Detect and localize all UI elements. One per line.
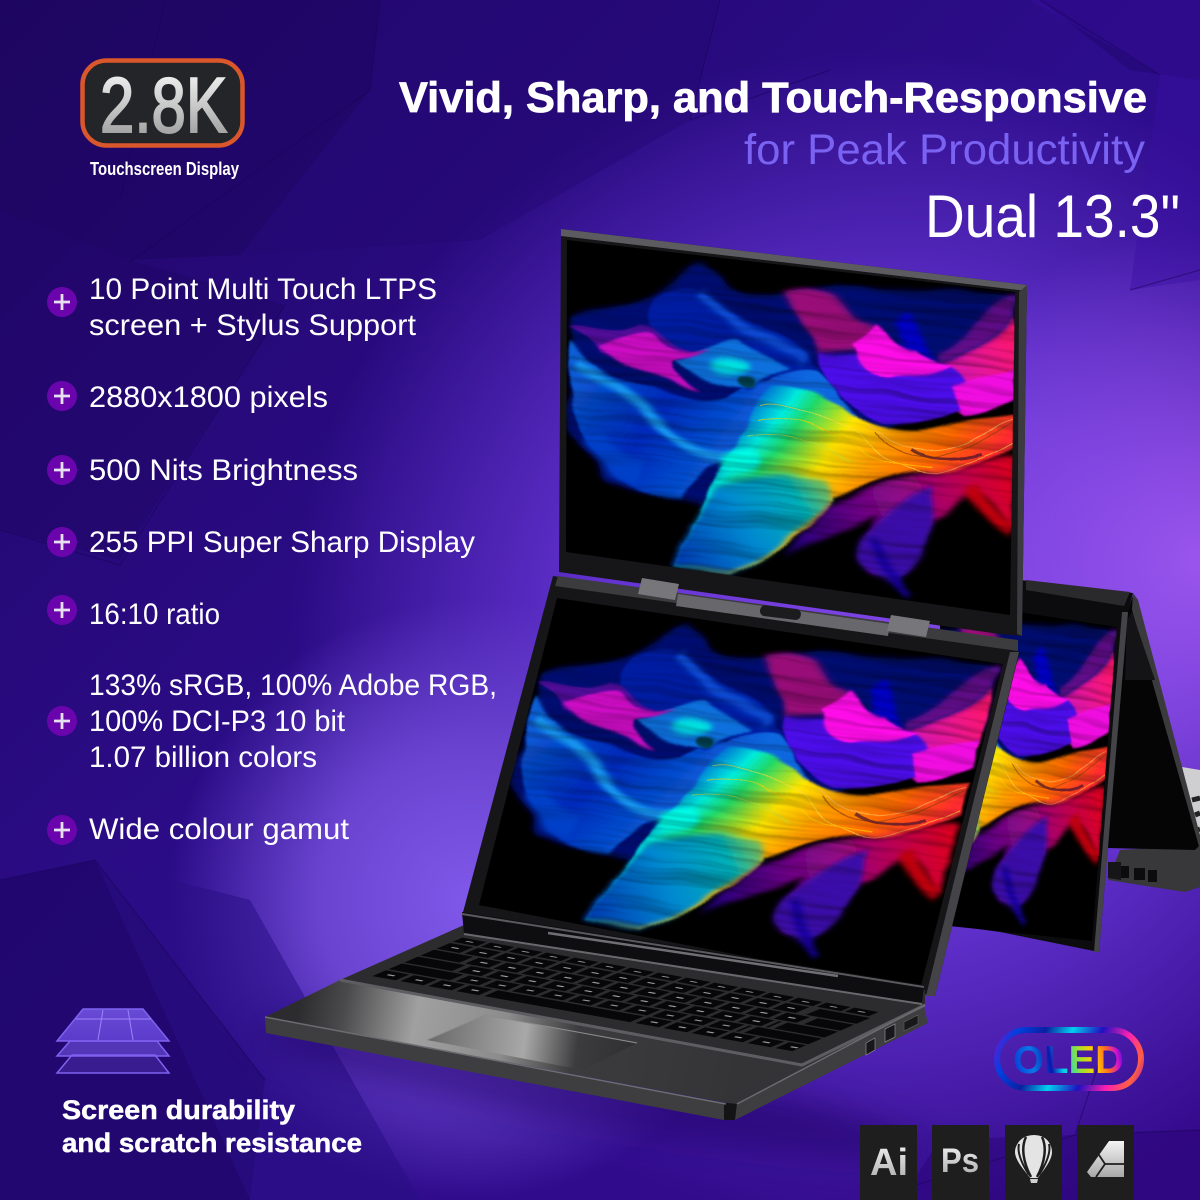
durability text: Screen durability (62, 1095, 295, 1125)
base sides (265, 1003, 928, 1120)
palm rest deck (265, 980, 802, 1103)
feature: brightness: 500 Nits Brightness (89, 454, 358, 487)
screen size: Dual 13.3" (925, 183, 1180, 250)
badge: 2.8K: 2.8K (100, 61, 227, 149)
icon: Ps: Ps (941, 1142, 979, 1180)
icon: glass layers (57, 1009, 169, 1073)
feature: ppi: 255 PPI Super Sharp Display (89, 526, 475, 559)
icon: Ai (860, 1125, 917, 1200)
feature: colour coverage: 133% sRGB, 100% Adobe RGB, (89, 669, 497, 702)
feature: colour coverage (47, 669, 497, 774)
webcam (759, 605, 801, 621)
icon: Ai: Ai (870, 1142, 908, 1184)
feature: ratio: 16:10 ratio (89, 598, 220, 631)
badge caption: Touchscreen Display (90, 158, 240, 179)
upper screen (555, 229, 1027, 651)
touchpad (427, 1015, 637, 1070)
feature: multi touch: 10 Point Multi Touch LTPS (89, 273, 437, 306)
hinge: left (638, 578, 679, 600)
keyboard (379, 940, 878, 1048)
feature: colour coverage: 100% DCI-P3 10 bit (89, 705, 346, 738)
hinge: right (887, 615, 930, 637)
hinge bar (555, 576, 1018, 651)
feature: gamut: Wide colour gamut (89, 813, 350, 846)
icon: Ps (932, 1125, 989, 1200)
laptop base (249, 912, 931, 1183)
feature: multi touch (47, 273, 437, 342)
lower screen (462, 576, 1019, 996)
rear bezel and screen (940, 580, 1133, 952)
icon: affinity (1077, 1125, 1134, 1200)
durability text (62, 1095, 362, 1158)
icon: balloon (1005, 1125, 1062, 1200)
feature: resolution: 2880x1800 pixels (89, 381, 328, 414)
rear panel (1108, 595, 1200, 850)
feature list (47, 273, 497, 846)
heading: Vivid, Sharp, and Touch-Responsive (399, 74, 1147, 122)
subheading: for Peak Productivity (744, 126, 1146, 174)
durability text: and scratch resistance (62, 1128, 362, 1158)
rear base with white keyboard (1108, 767, 1200, 892)
heading (399, 74, 1180, 250)
OLED badge (997, 1030, 1141, 1088)
OLED badge: OLED (1013, 1039, 1124, 1082)
side ports (866, 1015, 918, 1055)
feature: ratio (47, 595, 220, 631)
hinge bar base (462, 912, 924, 1004)
feature: colour coverage: 1.07 billion colors (89, 741, 317, 774)
software icons (860, 1125, 1134, 1200)
laptop rear in tent mode (940, 580, 1200, 952)
feature: multi touch: screen + Stylus Support (89, 309, 417, 342)
